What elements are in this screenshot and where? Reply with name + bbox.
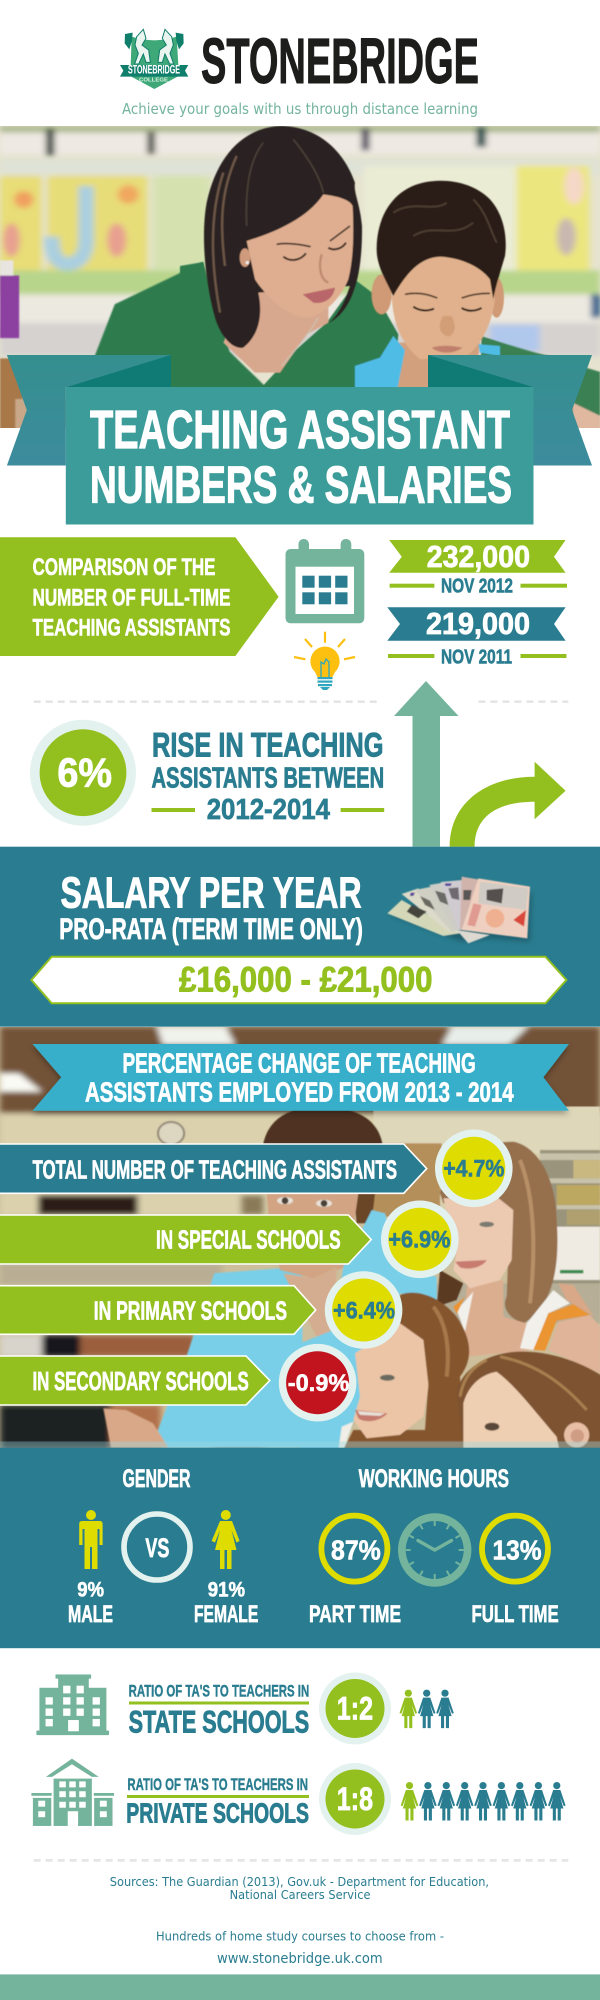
title banner	[7, 355, 592, 524]
bar: special schools	[0, 1215, 371, 1264]
panel: gender and working hours	[0, 1448, 600, 1648]
VS ring	[124, 1514, 190, 1580]
ribbon fold right	[428, 355, 533, 387]
bar: secondary schools	[0, 1356, 270, 1405]
icon: clock	[398, 1513, 471, 1587]
boy neck and shirt	[397, 342, 480, 387]
ribbon 232,000	[389, 540, 566, 573]
state rule	[129, 1702, 309, 1704]
badge: +6.4%	[325, 1271, 402, 1349]
date line left	[390, 584, 434, 588]
rise line 2: ASSISTANTS BETWEEN	[152, 763, 384, 795]
state schools label: STATE SCHOOLS	[129, 1703, 309, 1739]
badge: 1:2	[319, 1672, 391, 1744]
sources line 1: Sources: The Guardian (2013), Gov.uk - Department for Education,	[110, 1874, 489, 1889]
working hours heading: WORKING HOURS	[359, 1465, 509, 1493]
bar: special schools: IN SPECIAL SCHOOLS	[156, 1224, 341, 1254]
sweater	[179, 261, 212, 304]
ribbon tail left	[7, 355, 171, 466]
value 219,000: 219,000	[426, 606, 530, 641]
figures: 1 to 2	[400, 1690, 454, 1728]
comparison callout	[0, 537, 279, 656]
icon: light bulb	[294, 632, 355, 690]
badge: +4.7%: +4.7%	[443, 1156, 505, 1183]
badge: -0.9%: -0.9%	[288, 1370, 350, 1397]
comparison line 1: COMPARISON OF THE	[32, 554, 216, 581]
girl two	[343, 1293, 469, 1450]
private ratio label: RATIO OF TA'S TO TEACHERS IN	[127, 1776, 308, 1794]
footer bar	[0, 1974, 600, 2000]
badge: 1:8: 1:8	[337, 1781, 373, 1817]
female label: FEMALE	[194, 1601, 258, 1628]
date Nov 2011: NOV 2011	[441, 645, 512, 668]
sources line 2: National Careers Service	[230, 1887, 371, 1902]
rise text block	[152, 727, 384, 826]
logo crest	[120, 29, 188, 89]
date line left	[388, 654, 434, 658]
percentage change banner	[32, 1044, 569, 1111]
salary range value: £16,000 - £21,000	[179, 961, 432, 1000]
female percent: 91%	[208, 1579, 245, 1602]
courses line: Hundreds of home study courses to choose from -	[156, 1928, 444, 1943]
date line right	[520, 654, 566, 658]
badge: 1:2: 1:2	[337, 1690, 373, 1726]
icon: private school building	[31, 1759, 114, 1826]
badge: +6.9%: +6.9%	[388, 1227, 451, 1254]
logo small college: COLLEGE	[139, 78, 168, 84]
part time label: PART TIME	[309, 1601, 401, 1628]
girl one	[437, 1270, 463, 1307]
badge: -0.9%	[279, 1344, 356, 1421]
state ratio label: RATIO OF TA'S TO TEACHERS IN	[129, 1683, 309, 1701]
badge: +4.7%	[435, 1130, 513, 1207]
gender heading: GENDER	[122, 1465, 190, 1493]
green arrow panel	[0, 537, 279, 656]
part time ring	[321, 1516, 387, 1582]
figures: 1 to 8	[401, 1782, 566, 1820]
logo header	[120, 29, 188, 89]
photo: teacher with pupils	[0, 1027, 600, 1453]
bar: total number	[0, 1144, 427, 1193]
teacher face	[247, 194, 353, 318]
boy hair	[377, 181, 506, 299]
bar: secondary schools: IN SECONDARY SCHOOLS	[32, 1366, 249, 1396]
stat: 232,000 Nov 2012	[389, 539, 567, 598]
badge: +6.9%	[381, 1200, 459, 1278]
rise line right	[341, 808, 384, 812]
full time label: FULL TIME	[472, 1601, 559, 1628]
teacher hair	[204, 126, 362, 348]
website: www.stonebridge.uk.com	[217, 1951, 383, 1967]
icon: banknotes	[387, 877, 532, 943]
ribbon 219,000	[387, 607, 566, 641]
girl three	[457, 1352, 600, 1453]
full time ring	[482, 1516, 548, 1582]
banner panel	[66, 387, 534, 524]
comparison line 2: NUMBER OF FULL-TIME	[32, 584, 230, 612]
boy face	[372, 274, 392, 314]
salary subheading: PRO-RATA (TERM TIME ONLY)	[59, 913, 363, 946]
sources	[110, 1874, 489, 1902]
hero photo: teacher and boy	[0, 126, 600, 430]
teacher	[262, 1107, 383, 1153]
salary heading: SALARY PER YEAR	[60, 868, 362, 917]
part time percent: 87%	[331, 1534, 381, 1565]
bar: total number: TOTAL NUMBER OF TEACHING ASSISTANTS	[32, 1154, 397, 1184]
value 232,000: 232,000	[427, 539, 530, 574]
panel: salary	[0, 847, 600, 1027]
comparison line 3: TEACHING ASSISTANTS	[32, 614, 230, 642]
state schools text	[129, 1683, 309, 1739]
bar: primary schools: IN PRIMARY SCHOOLS	[94, 1295, 287, 1325]
VS text: VS	[145, 1533, 169, 1563]
icon: calendar	[286, 539, 364, 623]
stat: 6% badge	[30, 720, 136, 826]
arrow: up	[394, 681, 458, 847]
male label: MALE	[68, 1601, 113, 1628]
stat: 219,000 Nov 2011	[387, 606, 566, 668]
ribbon fold left	[67, 355, 171, 387]
badge: +6.4%: +6.4%	[333, 1297, 395, 1324]
date Nov 2012: NOV 2012	[441, 575, 513, 598]
logo small name: STONEBRIDGE	[128, 64, 180, 76]
rise years: 2012-2014	[207, 794, 330, 826]
private schools label: PRIVATE SCHOOLS	[126, 1798, 309, 1828]
icon: male	[79, 1510, 103, 1569]
bar: primary schools	[0, 1286, 316, 1334]
male percent: 9%	[77, 1579, 104, 1602]
icon: female	[212, 1510, 240, 1569]
arrow: curved right	[450, 762, 566, 847]
full time percent: 13%	[492, 1534, 542, 1565]
salary range box	[31, 957, 566, 1003]
date line right	[520, 584, 567, 588]
private schools text	[126, 1776, 309, 1828]
rise line left	[152, 808, 195, 812]
icon: state school building	[36, 1674, 109, 1735]
ribbon tail right	[428, 355, 592, 466]
tagline: Achieve your goals with us through distance learning	[122, 100, 478, 118]
private rule	[127, 1795, 309, 1798]
stat: 6% badge: 6%	[57, 750, 112, 796]
rise line 1: RISE IN TEACHING	[152, 727, 384, 765]
badge: 1:8	[319, 1763, 391, 1835]
room background	[372, 1106, 600, 1154]
